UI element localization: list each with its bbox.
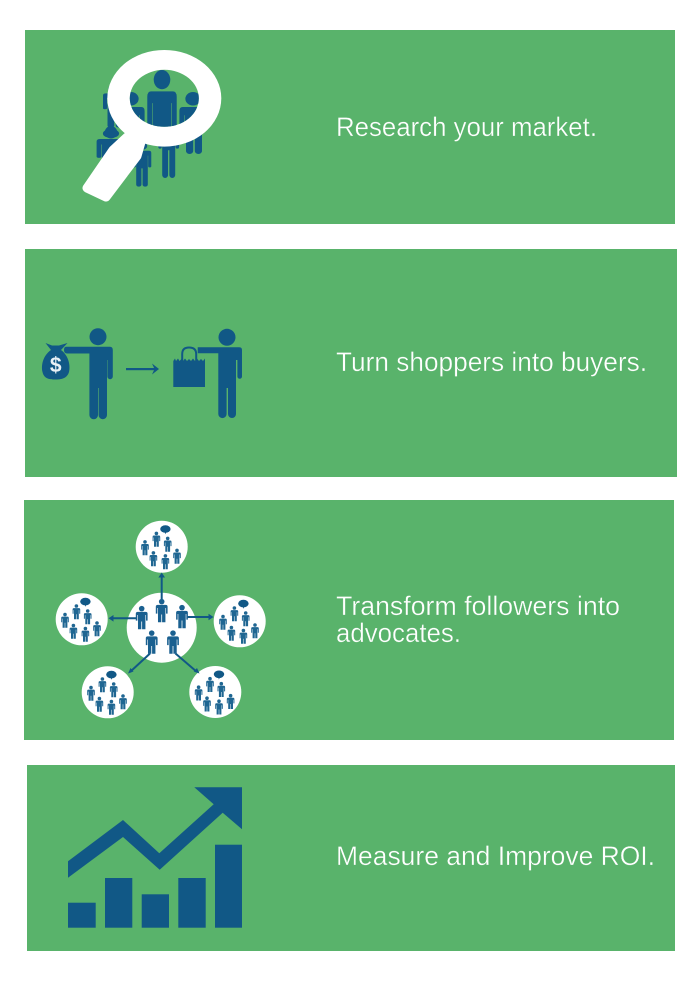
panel: measure and improve ROI [27, 765, 675, 951]
icon: person holding money bag: $ [50, 354, 62, 377]
arrow: exchange [126, 364, 159, 374]
text: turn shoppers into buyers: Turn shoppers into buyers. [336, 347, 647, 377]
icon: magnifying glass over people [87, 50, 221, 197]
panel: research your market [25, 30, 675, 224]
chart: rising bars and arrow [68, 787, 242, 928]
panel: transform followers into advocates [24, 500, 674, 740]
icon: person holding shopping bag [173, 329, 242, 418]
text: transform followers into advocates [336, 591, 620, 648]
panel: turn shoppers into buyers [25, 249, 677, 477]
text: research your market: Research your market. [336, 112, 597, 142]
text: transform followers into advocates: advocates. [336, 618, 461, 648]
diagram: advocate network [56, 521, 266, 718]
text: measure and improve ROI: Measure and Improve ROI. [336, 841, 655, 871]
text: transform followers into advocates: Transform followers into [336, 591, 620, 621]
icon: person holding money bag [42, 328, 113, 419]
